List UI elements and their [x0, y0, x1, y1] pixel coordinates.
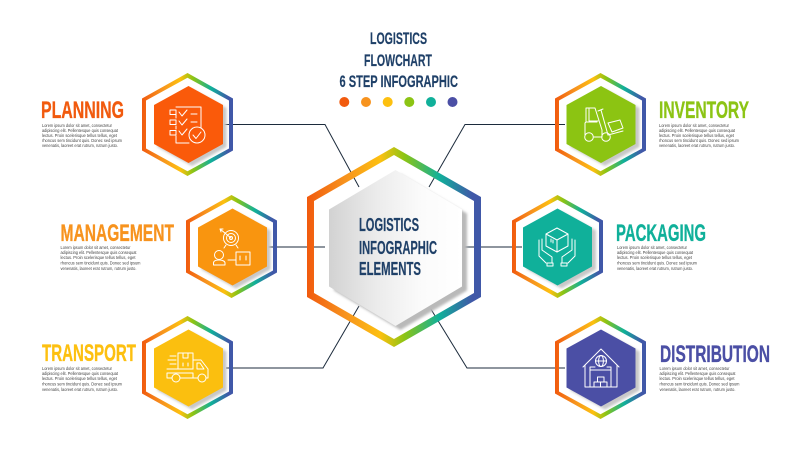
hexagon face: transport — [154, 330, 223, 406]
text block: inventory: Lorem ipsum dolor sit amet, consectetur — [659, 123, 729, 128]
hexagon face: distribution — [566, 330, 636, 406]
text block: inventory: adipiscing elit. Pellentesque quis consequat — [659, 128, 736, 133]
title: LOGISTICS — [370, 29, 427, 48]
text block: transport — [42, 366, 122, 392]
title: FLOWCHART — [364, 51, 432, 70]
text block: packaging: adipiscing elit. Pellentesque quis consequat — [617, 250, 694, 255]
hexagon face: management — [198, 208, 267, 286]
text block: planning: venenatis, laoreet erat rutrum, rutrum justo. — [42, 143, 118, 148]
text block: transport: venenatis, laoreet erat rutrum, rutrum justo. — [42, 387, 118, 392]
central text: LOGISTICS — [359, 215, 419, 235]
hexagon face: packaging — [523, 208, 592, 286]
central text — [359, 215, 437, 279]
text block: distribution: adipiscing elit. Pellentesque quis consequat — [660, 371, 736, 376]
text block: inventory: venenatis, laoreet erat rutrum, rutrum justo. — [659, 143, 735, 148]
central rainbow frame — [307, 147, 481, 347]
connector lines — [223, 124, 565, 368]
panel: distribution — [555, 316, 770, 419]
panel: inventory — [555, 73, 749, 176]
hexagon shadow: management — [202, 212, 270, 288]
panel: planning — [41, 73, 233, 176]
text block: management: Lorem ipsum dolor sit amet, consectetur — [60, 245, 131, 250]
text block: management: lectus. Proin scelerisque tellus tellus, eget — [60, 255, 136, 260]
central text: ELEMENTS — [359, 259, 421, 279]
text block: planning: rhoncus sem tincidunt quis. Donec sed ipsum — [42, 138, 122, 143]
icon: warehouse — [583, 349, 619, 387]
icon: checklist — [170, 107, 205, 143]
central hexagon — [307, 147, 481, 347]
text block: transport: adipiscing elit. Pellentesque quis consequat — [42, 371, 119, 376]
text block: transport: rhoncus sem tincidunt quis. Donec sed ipsum — [42, 382, 122, 386]
text block: management — [60, 245, 141, 271]
text block: packaging — [617, 245, 697, 271]
hexagon frame: packaging — [512, 195, 603, 298]
central paper face — [329, 170, 462, 326]
icon: target and person — [214, 229, 250, 265]
heading: transport: TRANSPORT — [42, 340, 136, 367]
colour dots — [339, 97, 458, 107]
hexagon shadow: packaging — [527, 212, 596, 288]
hexagon frame: inventory — [555, 73, 646, 176]
hexagon frame: planning — [142, 73, 233, 176]
hexagon shadow: planning — [158, 89, 226, 166]
text block: packaging: lectus. Proin scelerisque tellus tellus, eget — [617, 255, 693, 260]
heading: planning: PLANNING — [41, 97, 124, 124]
hexagon shadow: inventory — [570, 89, 640, 166]
hexagon frame: transport — [142, 316, 233, 419]
text block: distribution: venenatis, laoreet erat rutrum, rutrum justo. — [660, 387, 736, 392]
icon: forklift — [585, 108, 623, 141]
icon: hands holding box — [539, 228, 575, 266]
title — [340, 29, 458, 91]
text block: planning: lectus. Proin scelerisque tellus tellus, eget — [42, 133, 118, 138]
heading: inventory: INVENTORY — [659, 97, 749, 124]
text block: management: rhoncus sem tincidunt quis. Donec sed ipsum — [60, 260, 141, 266]
heading: packaging: PACKAGING — [616, 220, 706, 247]
hexagon shadow: transport — [158, 332, 226, 410]
panel: packaging — [512, 195, 706, 298]
text block: distribution: rhoncus sem tincidunt quis. Donec sed ipsum — [660, 382, 740, 386]
hexagon face: planning — [154, 86, 223, 163]
central text: INFOGRAPHIC — [359, 238, 437, 258]
text block: transport: Lorem ipsum dolor sit amet, consectetur — [42, 366, 112, 371]
text block: planning — [42, 123, 122, 148]
icon: delivery truck — [167, 353, 208, 382]
text block: distribution: lectus. Proin scelerisque tellus tellus, eget — [660, 376, 735, 381]
text block: packaging: rhoncus sem tincidunt quis. Donec sed ipsum — [617, 260, 697, 266]
text block: inventory: lectus. Proin scelerisque tellus tellus, eget — [659, 133, 735, 138]
text block: transport: lectus. Proin scelerisque tellus tellus, eget — [42, 376, 118, 381]
panel: management — [60, 195, 277, 298]
text block: planning: adipiscing elit. Pellentesque quis consequat — [42, 128, 119, 133]
central paper shadow — [334, 174, 467, 330]
text block: distribution — [660, 366, 740, 392]
text block: packaging: Lorem ipsum dolor sit amet, consectetur — [617, 245, 687, 250]
hexagon frame: distribution — [555, 316, 646, 419]
title: 6 STEP INFOGRAPHIC — [340, 72, 458, 91]
text block: management: venenatis, laoreet erat rutrum, rutrum justo. — [60, 266, 136, 271]
text block: management: adipiscing elit. Pellentesque quis consequat — [60, 250, 137, 255]
heading: management: MANAGEMENT — [60, 220, 174, 247]
text block: packaging: venenatis, laoreet erat rutrum, rutrum justo. — [617, 266, 693, 271]
hexagon shadow: distribution — [570, 332, 640, 410]
hexagon frame: management — [186, 195, 277, 298]
text block: inventory: rhoncus sem tincidunt quis. Donec sed ipsum — [659, 138, 739, 143]
hexagon face: inventory — [566, 86, 636, 163]
text block: inventory — [659, 123, 739, 148]
text block: distribution: Lorem ipsum dolor sit amet, consectetur — [660, 366, 730, 371]
panel: transport — [42, 316, 233, 419]
text block: planning: Lorem ipsum dolor sit amet, consectetur — [42, 123, 112, 128]
